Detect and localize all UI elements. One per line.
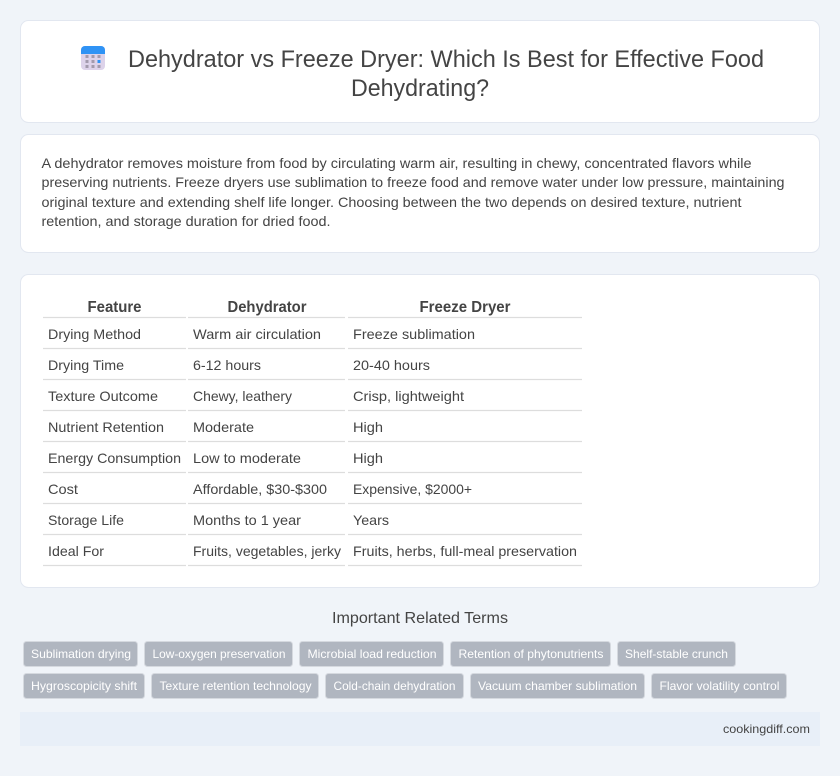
table header: Freeze Dryer — [420, 299, 510, 316]
table row: drying method — [48, 326, 475, 342]
footer — [20, 712, 820, 746]
text block: description — [42, 155, 784, 229]
table row: storage life: Storage Life — [48, 512, 124, 528]
table row: texture outcome: Crisp, lightweight — [353, 388, 464, 404]
chip: Low-oxygen preservation — [152, 647, 286, 661]
table row: storage life: Years — [353, 512, 389, 528]
table row: cost: Affordable, $30-$300 — [193, 481, 327, 497]
chip: Sublimation drying — [31, 647, 131, 661]
table row: energy consumption: Energy Consumption — [48, 450, 181, 466]
table row: ideal for — [48, 543, 577, 559]
chip: Microbial load reduction — [308, 647, 436, 661]
table row: storage life: Months to 1 year — [193, 512, 301, 528]
title: Dehydrator vs Freeze Dryer: Which Is Best for Effective Food — [128, 46, 764, 73]
panel: header — [20, 20, 820, 122]
panel: comparison table — [20, 274, 820, 588]
chip: Retention of phytonutrients — [458, 647, 604, 661]
table row: nutrient retention — [48, 419, 383, 435]
chip: Shelf-stable crunch — [625, 647, 728, 661]
table row: cost: Cost — [48, 481, 78, 497]
table row: nutrient retention: High — [353, 419, 383, 435]
chip — [450, 642, 610, 666]
table row: ideal for: Ideal For — [48, 543, 104, 559]
panel: description — [20, 134, 820, 252]
table row: storage life — [48, 512, 389, 528]
table row: texture outcome: Chewy, leathery — [193, 388, 292, 404]
chip: Flavor volatility control — [660, 679, 780, 693]
text block: description: original texture and extending shelf life longer. Choosing between the two depends on desired texture, nutrient — [42, 194, 742, 210]
table row: nutrient retention: Nutrient Retention — [48, 419, 164, 435]
table row: energy consumption: Low to moderate — [193, 450, 301, 466]
text block: description: retention, and storage duration for dried food. — [42, 213, 330, 229]
table row: drying time: 6-12 hours — [193, 357, 261, 373]
table row: nutrient retention: Moderate — [193, 419, 254, 435]
text block: description: preserving nutrients. Freeze dryers use sublimation to freeze food and remove water under low pressure, maintaining — [42, 174, 784, 190]
table row: ideal for: Fruits, vegetables, jerky — [193, 543, 341, 559]
table row: texture outcome: Texture Outcome — [48, 388, 158, 404]
chip — [652, 674, 786, 698]
table row: energy consumption — [48, 450, 383, 466]
chip — [470, 674, 644, 698]
table row: drying time: 20-40 hours — [353, 357, 430, 373]
title: Dehydrating? — [351, 75, 489, 102]
chip — [618, 642, 736, 666]
chip — [144, 642, 292, 666]
heading: important related terms: Important Related Terms — [332, 610, 508, 627]
chip: Texture retention technology — [160, 679, 312, 693]
footer source: cookingdiff.com — [723, 722, 810, 736]
chip — [152, 674, 318, 698]
title — [128, 46, 764, 102]
chip: Vacuum chamber sublimation — [478, 679, 637, 693]
table row: ideal for: Fruits, herbs, full-meal preservation — [353, 543, 577, 559]
table row: drying method: Freeze sublimation — [353, 326, 475, 342]
table header — [88, 299, 510, 316]
table row: cost — [48, 481, 472, 497]
chips: related terms — [24, 642, 786, 698]
table row: drying time: Drying Time — [48, 357, 124, 373]
icon: calendar — [81, 46, 105, 70]
chip: Cold-chain dehydration — [334, 679, 456, 693]
chip — [300, 642, 444, 666]
table header: Dehydrator — [228, 299, 306, 316]
chip — [326, 674, 464, 698]
table row: texture outcome — [48, 388, 464, 404]
chip — [24, 674, 144, 698]
chip — [24, 642, 138, 666]
table row: energy consumption: High — [353, 450, 383, 466]
table row: drying method: Drying Method — [48, 326, 141, 342]
chip: Hygroscopicity shift — [31, 679, 138, 693]
table row: drying time — [48, 357, 430, 373]
table row: cost: Expensive, $2000+ — [353, 481, 472, 497]
text block: description: A dehydrator removes moisture from food by circulating warm air, resulting in chewy, concentrated flavors while — [42, 155, 752, 171]
table header: Feature — [88, 299, 142, 316]
table row: drying method: Warm air circulation — [193, 326, 321, 342]
